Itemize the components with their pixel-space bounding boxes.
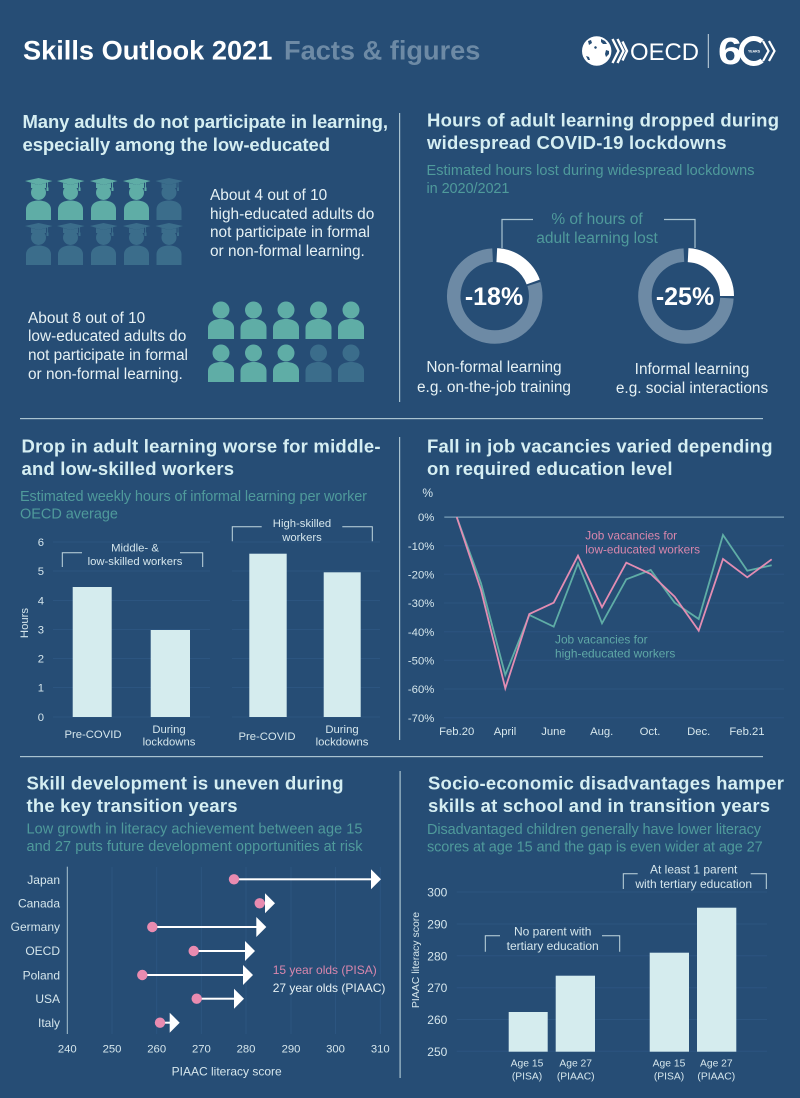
text: 4 out of 10: About 4 out of 10	[210, 187, 327, 204]
x axis labels: Age 27	[559, 1059, 592, 1070]
donut chart: informal learning	[645, 255, 727, 337]
x axis labels: lockdowns	[316, 736, 369, 748]
bracket: at least 1 parent with tertiary education: At least 1 parent	[650, 863, 738, 877]
x axis labels	[64, 724, 369, 748]
subheading: scores at age 15 and the gap is even wider at age 27	[427, 840, 763, 856]
y axis labels: 290	[427, 918, 448, 932]
bars	[509, 908, 736, 1052]
y axis labels: 0%	[418, 512, 434, 524]
dumbbell chart: literacy scores	[11, 867, 390, 1078]
x axis labels: Pre-COVID	[64, 729, 122, 741]
subheading: Low growth in literacy achievement between age 15	[26, 822, 362, 838]
x axis labels: Age 15	[653, 1059, 686, 1070]
text: 8 out of 10: low-educated adults do	[28, 328, 186, 345]
title	[23, 34, 480, 66]
title: Skills Outlook 2021	[23, 34, 272, 66]
x axis labels: 240	[58, 1044, 77, 1056]
y axis labels: 4	[38, 596, 44, 608]
x axis labels: During	[152, 724, 186, 736]
label: high-educated	[555, 632, 675, 661]
y axis labels	[408, 486, 434, 725]
y axis labels: -20%	[408, 570, 434, 582]
text: 8 out of 10	[28, 310, 188, 383]
y axis labels: 270	[427, 981, 448, 995]
y axis labels: %	[422, 486, 433, 500]
bracket: no parent with tertiary education: tertiary education	[507, 939, 599, 953]
y axis labels: 5	[38, 566, 44, 578]
country labels: USA	[35, 992, 60, 1006]
subheading: Estimated hours lost during widespread lockdowns	[426, 163, 754, 179]
x axis labels: Age 15	[511, 1059, 544, 1070]
60 years mark: YEARS	[748, 50, 761, 54]
y axis labels: -70%	[408, 713, 434, 725]
heading	[22, 111, 388, 155]
heading: Skill development is uneven during	[26, 772, 344, 794]
x axis labels: 300	[326, 1044, 345, 1056]
subheading: in 2020/2021	[426, 181, 510, 197]
60 years mark	[708, 31, 774, 73]
label: non-formal learning	[417, 359, 571, 396]
x axis labels: lockdowns	[143, 736, 196, 748]
y axis labels: Hours	[19, 608, 31, 638]
heading	[22, 436, 380, 479]
donut chart: informal learning: -25%	[656, 283, 714, 311]
x axis title: PIAAC literacy score	[172, 1064, 282, 1078]
x axis labels	[58, 1044, 390, 1056]
x axis labels: Pre-COVID	[238, 731, 296, 743]
country labels	[11, 873, 60, 1030]
subheading	[26, 822, 363, 855]
country labels: Italy	[38, 1016, 60, 1030]
subheading: OECD average	[20, 506, 118, 522]
label: informal learning: Informal learning	[635, 361, 749, 378]
icon grid: high-educated adults	[25, 178, 183, 265]
heading: and low-skilled workers	[22, 458, 234, 479]
bars	[73, 554, 361, 717]
text: 4 out of 10: not participate in formal	[210, 224, 370, 241]
country labels: Japan	[27, 873, 60, 887]
label: low-educated: low-educated workers	[585, 542, 700, 556]
bracket: at least 1 parent with tertiary education: with tertiary education	[634, 877, 752, 891]
x axis labels: Age 27	[700, 1059, 733, 1070]
dots	[137, 874, 265, 1028]
x axis labels: 270	[192, 1044, 211, 1056]
bracket: high skilled: High-skilled	[273, 518, 331, 530]
heading	[428, 772, 784, 816]
x axis labels: 250	[103, 1044, 121, 1056]
y axis labels: 300	[427, 886, 448, 900]
title: Facts & figures	[284, 34, 480, 66]
text: 8 out of 10: About 8 out of 10	[28, 310, 145, 327]
bar chart: weekly hours	[19, 518, 380, 748]
x axis labels: (PISA)	[512, 1071, 542, 1082]
heading: skills at school and in transition years	[428, 795, 770, 816]
y axis labels: 3	[38, 624, 44, 636]
x axis labels: Aug.	[590, 726, 613, 738]
x axis labels: April	[494, 726, 516, 738]
heading	[26, 772, 344, 816]
legend	[273, 963, 385, 995]
y axis labels: 250	[427, 1045, 448, 1059]
y axis labels: -30%	[408, 598, 434, 610]
heading: Fall in job vacancies varied depending	[427, 436, 772, 456]
heading: Hours of adult learning dropped during	[427, 110, 779, 130]
x axis labels: (PIAAC)	[697, 1071, 735, 1082]
60 years mark: 6	[718, 31, 742, 73]
country labels: Germany	[11, 920, 60, 934]
bracket: at least 1 parent with tertiary education	[623, 863, 766, 891]
x axis labels: 280	[237, 1044, 255, 1056]
y axis labels: 280	[427, 949, 448, 963]
y axis labels: PIAAC literacy score	[410, 912, 422, 1008]
bracket: middle and low skilled: Middle- &	[111, 543, 159, 555]
y axis labels	[410, 886, 448, 1059]
panel: skill development uneven	[11, 772, 390, 1078]
label: low-educated: Job vacancies for	[585, 528, 677, 542]
heading: especially among the low-educated	[22, 134, 330, 155]
x axis labels: Feb.20	[439, 726, 474, 738]
x axis labels: June	[541, 726, 566, 738]
country labels: OECD	[25, 944, 60, 958]
arrows	[142, 869, 381, 1033]
legend: 27 year olds (PIAAC)	[273, 981, 385, 995]
subheading	[427, 822, 763, 856]
x axis labels: 290	[282, 1044, 300, 1056]
OECD wordmark: OECD	[630, 39, 699, 66]
donut chart: non-formal learning: -18%	[465, 283, 523, 311]
x axis labels: Dec.	[687, 726, 710, 738]
text: 8 out of 10: or non-formal learning.	[28, 366, 183, 383]
callout: percent of hours lost: % of hours of	[551, 211, 643, 228]
bar chart: literacy score by parental education	[410, 863, 767, 1082]
bracket: middle and low skilled	[62, 543, 203, 568]
icon grid: low-educated adults	[208, 302, 364, 382]
heading: Drop in adult learning worse for middle-	[22, 436, 380, 456]
line chart: job vacancies	[408, 486, 784, 738]
y axis labels: 2	[38, 654, 44, 666]
label: non-formal learning: Non-formal learning	[426, 359, 562, 376]
subheading	[20, 489, 367, 522]
subheading: Estimated weekly hours of informal learning per worker	[20, 489, 367, 505]
country labels: Canada	[18, 896, 60, 910]
heading: Socio-economic disadvantages hamper	[428, 772, 784, 794]
x axis labels: Feb.21	[729, 726, 765, 738]
donut chart: non-formal learning	[454, 255, 536, 337]
x axis labels: (PIAAC)	[557, 1071, 595, 1082]
y axis labels: -10%	[408, 541, 434, 553]
heading: on required education level	[427, 458, 672, 479]
text: 4 out of 10: or non-formal learning.	[210, 243, 365, 260]
panel: many adults do not participate	[22, 111, 388, 383]
bracket: middle and low skilled: low-skilled workers	[88, 556, 183, 568]
subheading	[426, 163, 754, 197]
x axis labels	[439, 726, 765, 738]
x axis labels: Oct.	[640, 726, 660, 738]
bracket: no parent with tertiary education: No parent with	[514, 925, 591, 939]
panel: drop in adult learning	[19, 436, 380, 748]
y axis labels: 0	[38, 712, 44, 724]
subheading: Disadvantaged children generally have lower literacy	[427, 822, 762, 838]
label: informal learning: e.g. social interactions	[616, 380, 768, 397]
callout: percent of hours lost: adult learning lost	[536, 230, 658, 247]
x axis labels: 310	[371, 1044, 390, 1056]
label: high-educated: Job vacancies for	[555, 632, 648, 646]
line: high-educated workers	[457, 517, 772, 675]
x axis labels	[511, 1059, 735, 1082]
country labels: Poland	[23, 968, 60, 982]
text: 4 out of 10: high-educated adults do	[210, 206, 374, 223]
y axis labels: -50%	[408, 656, 434, 668]
text: 4 out of 10	[210, 187, 374, 260]
y axis labels: 260	[427, 1013, 448, 1027]
callout: percent of hours lost	[502, 211, 695, 248]
panel: socio-economic disadvantages	[410, 772, 784, 1082]
panel: fall in job vacancies	[408, 436, 784, 738]
y axis labels: 1	[38, 682, 44, 694]
heading: the key transition years	[26, 795, 238, 816]
label: informal learning	[616, 361, 768, 397]
heading: Many adults do not participate in learning,	[22, 111, 388, 132]
icon: OECD chevrons	[612, 39, 627, 63]
y axis labels: -40%	[408, 627, 434, 639]
y axis labels: 6	[38, 537, 44, 549]
bracket: high skilled: workers	[281, 532, 322, 544]
x axis labels: (PISA)	[654, 1071, 684, 1082]
logo: OECD 60 years	[582, 31, 774, 73]
subheading: and 27 puts future development opportunities at risk	[26, 839, 363, 855]
y axis labels	[19, 537, 44, 724]
label: high-educated: high-educated workers	[555, 647, 675, 661]
legend: 15 year olds (PISA)	[273, 963, 377, 977]
text: 8 out of 10: not participate in formal	[28, 347, 188, 364]
heading	[426, 110, 779, 153]
x axis labels: 260	[147, 1044, 166, 1056]
bracket: high skilled	[232, 518, 372, 544]
bracket: no parent with tertiary education	[485, 925, 620, 953]
label: low-educated	[585, 528, 700, 556]
panel: hours of adult learning dropped	[417, 110, 779, 397]
y axis labels: -60%	[408, 684, 434, 696]
heading: widespread COVID-19 lockdowns	[426, 132, 726, 153]
line: low-educated workers	[457, 517, 772, 688]
label: non-formal learning: e.g. on-the-job training	[417, 379, 571, 396]
x axis labels: During	[325, 724, 359, 736]
icon: globe	[582, 36, 611, 66]
heading	[427, 436, 772, 479]
